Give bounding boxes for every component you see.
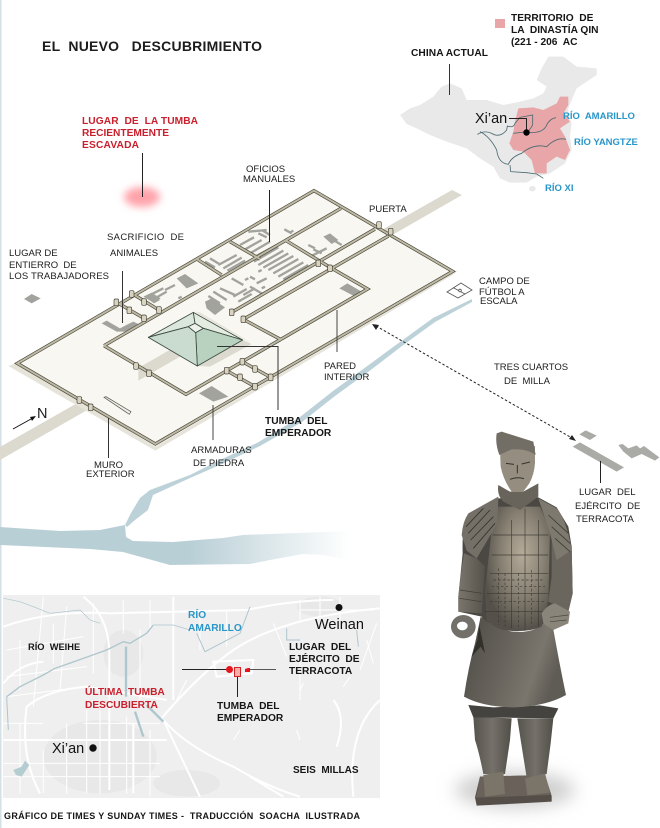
icon: football field to scale xyxy=(447,283,472,298)
terracotta army site xyxy=(573,430,659,472)
label: tres cuartos de milla: TRES CUARTOS xyxy=(494,362,568,373)
label: lugar de entierro: LOS TRABAJADORES xyxy=(9,271,109,282)
map labels: RÍO xyxy=(188,608,206,621)
label: armaduras de piedra xyxy=(191,405,252,469)
label: campo de fútbol: CAMPO DE xyxy=(479,276,530,287)
walls xyxy=(17,191,453,444)
label: lugar de entierro: ENTIERRO DE xyxy=(9,260,77,271)
feet xyxy=(483,772,505,797)
pyramid: emperor's tomb xyxy=(148,312,252,367)
callout: recently excavated tomb site: ESCAVADA xyxy=(82,140,140,151)
footer credit: GRÁFICO DE TIMES Y SUNDAY TIMES - TRADUCCIÓN SOACHA ILUSTRADA xyxy=(4,810,360,821)
terracotta warrior statue xyxy=(451,432,575,808)
label: lugar de entierro xyxy=(9,248,109,282)
major roads xyxy=(3,597,380,797)
present-day China xyxy=(400,57,597,183)
label: lugar del ejército de terracota: TERRACOTA xyxy=(576,514,635,525)
icon: tomb site glow xyxy=(124,153,160,207)
label: muro exterior xyxy=(86,418,135,480)
callout: recently excavated tomb site: LUGAR DE LA TUMBA xyxy=(82,116,199,127)
map: Xi'an region xyxy=(3,595,380,798)
river xyxy=(0,299,472,565)
thin storage pit xyxy=(104,397,131,414)
map: China xyxy=(400,57,597,191)
label: tres cuartos de milla xyxy=(494,362,568,387)
label: oficios manuales: MANUALES xyxy=(243,174,295,185)
label: oficios manuales: OFICIOS xyxy=(246,164,285,175)
legs xyxy=(473,717,512,774)
label: pared interior: PARED xyxy=(324,361,356,372)
floor shadow xyxy=(455,772,575,808)
right shoulder xyxy=(538,498,572,560)
armor xyxy=(485,507,550,631)
label: sacrificio de animales xyxy=(107,232,184,323)
Qin dynasty territory xyxy=(509,97,570,173)
head xyxy=(500,446,535,492)
north arrow xyxy=(13,406,47,429)
label: tumba del emperador: TUMBA DEL xyxy=(265,416,327,427)
topknot hat xyxy=(496,432,536,455)
label: pared interior: INTERIOR xyxy=(324,372,370,383)
label: última tumba descubierta: DESCUBIERTA xyxy=(85,700,158,711)
map labels: RÍO WEIHE xyxy=(28,642,80,652)
label: lugar del ejército on map xyxy=(250,642,360,677)
label: lugar del ejército de terracota xyxy=(575,461,640,525)
road through the inner compound xyxy=(138,329,213,381)
marker: Xi'an: Xi’an xyxy=(52,741,84,757)
label: última tumba descubierta: ÚLTIMA TUMBA xyxy=(85,685,165,698)
label: muro exterior: MURO xyxy=(94,460,123,471)
labels: rivers of China xyxy=(545,111,638,194)
label: campo de fútbol: FÚTBOL A xyxy=(479,287,525,298)
north arrow: N xyxy=(37,406,47,422)
legend: Qin territory: TERRITORIO DE xyxy=(511,13,594,24)
label: armaduras de piedra: ARMADURAS xyxy=(191,445,252,456)
label: lugar del ejército on map: LUGAR DEL xyxy=(289,642,351,653)
outer enclosure floor xyxy=(17,190,453,443)
left hand xyxy=(451,615,476,638)
under-robe hem xyxy=(468,705,558,718)
label: lugar del ejército de terracota: LUGAR DEL xyxy=(579,487,636,498)
label: sacrificio de animales: SACRIFICIO DE xyxy=(107,232,184,243)
label: puerta: PUERTA xyxy=(369,204,407,215)
label: muro exterior: EXTERIOR xyxy=(86,469,135,480)
sash shadow xyxy=(472,625,485,657)
label: lugar del ejército on map: TERRACOTA xyxy=(289,666,353,677)
map labels xyxy=(28,608,359,776)
label: china actual: CHINA ACTUAL xyxy=(411,48,488,59)
ground shadow xyxy=(8,270,458,451)
face details xyxy=(506,462,530,479)
label: oficios manuales xyxy=(243,164,295,242)
label: tumba del emperador on map: EMPERADOR xyxy=(217,713,284,724)
legend: Qin territory: LA DINASTÍA QIN xyxy=(511,23,599,36)
building blocks xyxy=(24,283,362,402)
map labels: AMARILLO xyxy=(188,623,242,634)
label: lugar del ejército on map: EJÉRCITO DE xyxy=(289,652,360,665)
label: última tumba descubierta xyxy=(85,685,165,711)
labels: rivers of China: RÍO AMARILLO xyxy=(563,111,635,122)
rivers xyxy=(3,598,358,737)
minor roads xyxy=(3,597,377,797)
robe xyxy=(464,617,566,707)
right arm xyxy=(548,540,573,612)
left shoulder xyxy=(462,497,498,558)
labels: rivers of China: RÍO XI xyxy=(545,183,574,194)
marker: Xi'an on China map xyxy=(475,111,530,136)
urban areas xyxy=(43,597,343,797)
site plan of the mausoleum xyxy=(8,190,458,451)
base xyxy=(475,775,552,806)
label: tumba del emperador on map: TUMBA DEL xyxy=(217,701,279,712)
label: china actual xyxy=(411,48,488,95)
callout: recently excavated tomb site: RECIENTEMENTE xyxy=(82,128,169,139)
label: tres cuartos de milla: DE MILLA xyxy=(504,376,551,387)
collar xyxy=(498,483,538,510)
rivers xyxy=(477,115,566,178)
label: pared interior xyxy=(324,310,370,383)
legend: Qin territory: (221 - 206 AC xyxy=(511,37,578,48)
label: tumba del emperador: EMPERADOR xyxy=(265,428,332,439)
road xyxy=(0,190,462,460)
label: armaduras de piedra: DE PIEDRA xyxy=(193,458,245,469)
marker: Xi'an on China map: Xi’an xyxy=(475,111,507,127)
label: tumba del emperador on map xyxy=(217,677,284,724)
legend: Qin territory xyxy=(495,13,599,48)
markers: red sites on map xyxy=(182,666,250,676)
label: campo de fútbol: ESCALA xyxy=(480,296,518,307)
armor plates xyxy=(485,508,548,630)
workshop bars xyxy=(145,233,338,315)
upper body silhouette xyxy=(458,497,573,625)
map labels: SEIS MILLAS xyxy=(293,765,359,776)
label: tumba del emperador xyxy=(217,346,332,439)
right hand xyxy=(542,603,570,630)
label: lugar de entierro: LUGAR DE xyxy=(9,248,58,259)
marker: Weinan: Weinan xyxy=(315,617,364,633)
title: EL NUEVO DESCUBRIMIENTO xyxy=(42,38,262,54)
left arm xyxy=(458,553,485,613)
marker: Weinan xyxy=(315,604,364,633)
label: sacrificio de animales: ANIMALES xyxy=(110,248,158,259)
labels: rivers of China: RÍO YANGTZE xyxy=(574,137,638,148)
callout: recently excavated tomb site xyxy=(82,116,199,151)
label: lugar del ejército de terracota: EJÉRCITO DE xyxy=(575,501,640,512)
dashed distance arrow xyxy=(372,324,576,441)
label: campo de fútbol xyxy=(479,276,530,307)
gates xyxy=(77,222,393,411)
